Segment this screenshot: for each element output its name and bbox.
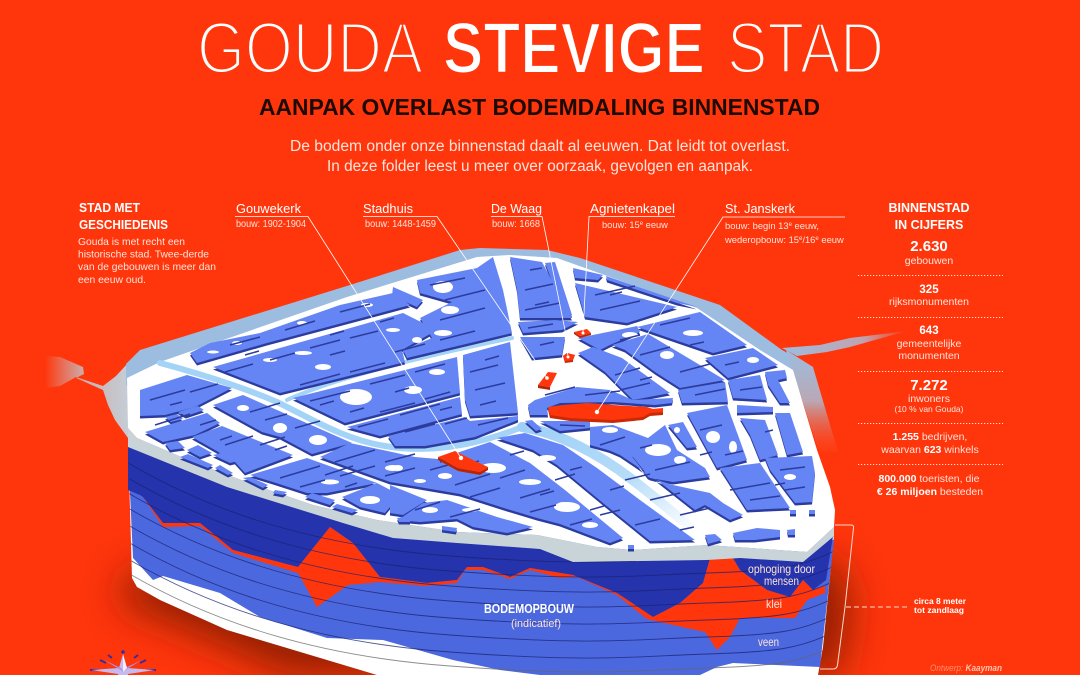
city surface bbox=[127, 255, 835, 552]
intro text: De bodem onder onze binnenstad daalt al eeuwen. Dat leidt tot overlast. bbox=[290, 138, 790, 155]
monument: St. Janskerk bbox=[548, 403, 663, 423]
stat: inwoners: 7.272 bbox=[910, 377, 948, 394]
soil labels: mensen bbox=[764, 574, 799, 588]
stat: rijksmonumenten bbox=[889, 284, 969, 308]
title: STEVIGE bbox=[443, 9, 705, 89]
stat: gemeentelijke monumenten: gemeentelijke bbox=[897, 338, 962, 350]
monument: Stadhuis bbox=[538, 372, 557, 390]
stat: toeristen bbox=[877, 473, 983, 498]
label: Agnietenkapel: e bbox=[640, 221, 644, 227]
stat: toeristen: 800.000 toeristen, die bbox=[878, 473, 980, 485]
text block: stad met geschiedenis: STAD MET bbox=[79, 201, 140, 215]
label: Agnietenkapel bbox=[582, 201, 675, 334]
building block shadows bbox=[140, 260, 815, 552]
label: De Waag bbox=[491, 201, 570, 358]
stat: gebouwen: 2.630 bbox=[910, 238, 948, 255]
text block: stad met geschiedenis: GESCHIEDENIS bbox=[79, 218, 168, 232]
depth contour lines bbox=[128, 463, 834, 672]
subtitle: AANPAK OVERLAST BODEMDALING BINNENSTAD bbox=[259, 94, 820, 120]
label: Gouwekerk bbox=[235, 201, 463, 460]
soil labels bbox=[484, 562, 815, 649]
stat: rijksmonumenten: 325 bbox=[919, 284, 939, 296]
intro text bbox=[290, 138, 790, 175]
stat: inwoners bbox=[895, 377, 964, 414]
stat: inwoners: (10 % van Gouda) bbox=[895, 404, 964, 414]
label: Stadhuis: bouw: 1448-1459 bbox=[365, 219, 436, 230]
label: St. Janskerk: bouw: begin 13 bbox=[725, 220, 789, 231]
title: STAD bbox=[727, 9, 884, 89]
river right bbox=[782, 331, 907, 356]
canals bbox=[160, 338, 694, 530]
label: Agnietenkapel: bouw: 15 bbox=[602, 220, 640, 230]
label: St. Janskerk: eeuw bbox=[819, 234, 844, 245]
label: St. Janskerk: St. Janskerk bbox=[725, 201, 795, 216]
monument: De Waag bbox=[563, 353, 575, 363]
stat: inwoners: inwoners bbox=[908, 393, 950, 405]
label: Agnietenkapel: Agnietenkapel bbox=[590, 201, 675, 216]
stat: gemeentelijke monumenten: 643 bbox=[919, 325, 939, 337]
text block: stad met geschiedenis: historische stad. Twee-derde bbox=[78, 248, 209, 260]
label: St. Janskerk: e bbox=[815, 236, 819, 242]
stat: toeristen: € 26 miljoen besteden bbox=[877, 486, 983, 498]
text block: stad met geschiedenis bbox=[78, 201, 216, 286]
credit: Ontwerp: Kaayman bbox=[930, 663, 1002, 674]
soil labels: ophoging door bbox=[748, 562, 815, 576]
river left bbox=[45, 356, 128, 438]
stat: bedrijven bbox=[880, 431, 979, 456]
soil body bbox=[128, 440, 834, 675]
label: St. Janskerk: eeuw, bbox=[792, 220, 819, 231]
rim fade right bbox=[786, 350, 838, 452]
monument: Gouwekerk bbox=[438, 451, 488, 475]
stat: bedrijven: 1.255 bedrijven, bbox=[893, 431, 967, 443]
title: GOUDA bbox=[197, 9, 423, 89]
soil base (white sand layer) bbox=[128, 440, 834, 675]
stats panel: binnenstad in cijfers bbox=[858, 201, 1003, 498]
text block: stad met geschiedenis: Gouda is met recht een bbox=[78, 236, 185, 248]
stat: rijksmonumenten: rijksmonumenten bbox=[889, 296, 969, 308]
courtyards bbox=[207, 281, 796, 528]
depth bracket: tot zandlaag bbox=[914, 605, 964, 615]
text block: stad met geschiedenis: een eeuw oud. bbox=[78, 274, 146, 286]
monument: Agnietenkapel bbox=[574, 329, 591, 338]
soil labels: BODEMOPBOUW bbox=[484, 602, 574, 616]
depth bracket: circa 8 meter bbox=[914, 596, 967, 606]
depth bracket bbox=[820, 525, 967, 669]
icon: compass rose bbox=[90, 650, 156, 675]
label: St. Janskerk: /16 bbox=[802, 234, 815, 245]
stat: gemeentelijke monumenten: monumenten bbox=[898, 350, 960, 362]
stat: gebouwen: gebouwen bbox=[905, 255, 953, 267]
layer: klei bbox=[143, 497, 825, 650]
label: De Waag: De Waag bbox=[491, 201, 542, 216]
label: St. Janskerk: wederopbouw: 15 bbox=[725, 234, 799, 245]
title bbox=[197, 9, 884, 89]
label: St. Janskerk: e bbox=[789, 222, 793, 228]
ground shadow bbox=[115, 560, 852, 675]
label: Stadhuis: Stadhuis bbox=[363, 201, 413, 216]
stats heading: BINNENSTAD bbox=[888, 201, 970, 215]
label: Agnietenkapel: eeuw bbox=[643, 220, 668, 230]
label: Stadhuis bbox=[363, 201, 549, 380]
intro text: In deze folder leest u meer over oorzaak, gevolgen en aanpak. bbox=[327, 158, 753, 175]
label: Gouwekerk: bouw: 1902-1904 bbox=[236, 219, 306, 230]
building blocks bbox=[140, 257, 815, 549]
soil labels: klei bbox=[766, 597, 782, 611]
label: St. Janskerk: e bbox=[799, 236, 803, 242]
soil labels: (indicatief) bbox=[511, 618, 561, 630]
stat: bedrijven: waarvan 623 winkels bbox=[880, 444, 979, 456]
text block: stad met geschiedenis: van de gebouwen is meer dan bbox=[78, 261, 216, 273]
grey edge band bbox=[128, 428, 834, 562]
label: Gouwekerk: Gouwekerk bbox=[236, 201, 301, 216]
soil labels: veen bbox=[758, 635, 779, 649]
layer: ophoging door mensen bbox=[128, 440, 834, 617]
layer: veen bbox=[128, 450, 834, 675]
label: St. Janskerk bbox=[595, 201, 845, 414]
rim: steel blue quay bbox=[126, 248, 813, 390]
stats heading bbox=[888, 201, 970, 232]
roof shadow bars bbox=[150, 268, 805, 530]
label: De Waag: bouw: 1668 bbox=[492, 219, 540, 230]
stats heading: IN CIJFERS bbox=[895, 218, 963, 232]
stat: gemeentelijke monumenten bbox=[897, 325, 962, 362]
stat: gebouwen bbox=[905, 238, 953, 267]
